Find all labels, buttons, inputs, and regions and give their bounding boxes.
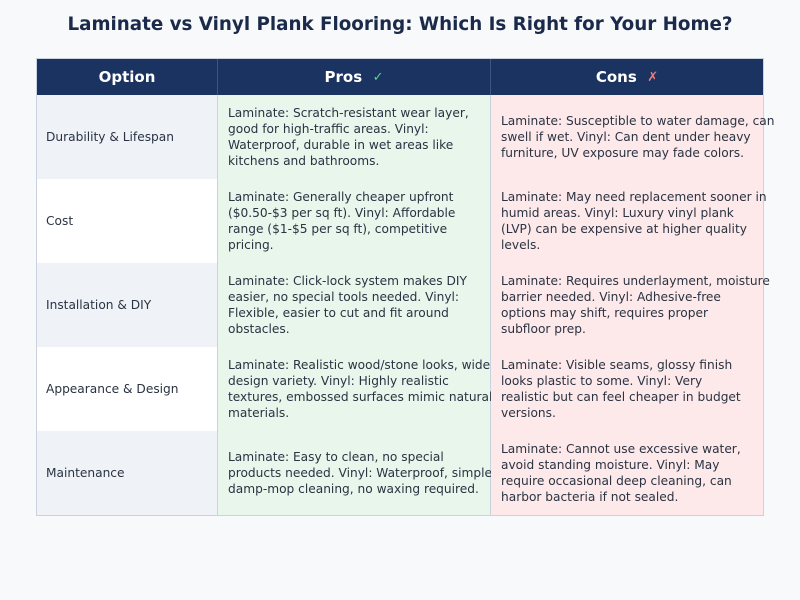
comparison table: (LVP) can be expensive at higher quality [501,222,747,236]
comparison table: damp-mop cleaning, no waxing required. [228,482,479,496]
comparison table: Laminate: Easy to clean, no special [228,450,444,464]
comparison table: products needed. Vinyl: Waterproof, simple [228,466,492,480]
row: appearance: Appearance & Design [46,382,179,396]
comparison table: Laminate: May need replacement sooner in [501,190,767,204]
comparison table: materials. [228,406,289,420]
header: option: Option [99,68,155,86]
comparison table: subfloor prep. [501,322,586,336]
comparison table: require occasional deep cleaning, can [501,474,732,488]
comparison table: pricing. [228,238,274,252]
header: pros [218,59,491,95]
row: cost: Cost [46,214,73,228]
row: appearance [37,347,218,431]
comparison table: kitchens and bathrooms. [228,154,379,168]
comparison table: looks plastic to some. Vinyl: Very [501,374,702,388]
comparison table: ($0.50-$3 per sq ft). Vinyl: Affordable [228,206,455,220]
header: cons: ✗ [647,70,658,84]
row: maintenance: Maintenance [46,466,124,480]
comparison table: obstacles. [228,322,290,336]
header: pros: ✓ [373,70,383,84]
row: installation: Installation & DIY [46,298,151,312]
row: cost [37,179,218,263]
header: cons [491,59,763,95]
comparison table: avoid standing moisture. Vinyl: May [501,458,719,472]
comparison table: humid areas. Vinyl: Luxury vinyl plank [501,206,734,220]
row: maintenance [37,431,218,515]
comparison table: options may shift, requires proper [501,306,708,320]
comparison table: Laminate: Realistic wood/stone looks, wide [228,358,490,372]
row: durability [37,95,218,179]
comparison table: Laminate: Susceptible to water damage, can [501,114,774,128]
comparison table: textures, embossed surfaces mimic natural [228,390,492,404]
comparison table: furniture, UV exposure may fade colors. [501,146,744,160]
comparison table: Laminate: Visible seams, glossy finish [501,358,732,372]
header: pros: Pros [324,68,362,86]
comparison table: Laminate: Click-lock system makes DIY [228,274,467,288]
row: installation [37,263,218,347]
comparison table: versions. [501,406,556,420]
comparison table [36,58,764,516]
comparison table: Laminate: Requires underlayment, moisture [501,274,770,288]
comparison table: Laminate: Cannot use excessive water, [501,442,741,456]
header: cons: Cons [596,68,637,86]
comparison table: Laminate: Generally cheaper upfront [228,190,453,204]
title: Laminate vs Vinyl Plank Flooring: Which Is Right for Your Home? [67,14,732,35]
comparison table: easier, no special tools needed. Vinyl: [228,290,459,304]
comparison table: levels. [501,238,540,252]
comparison table: Flexible, easier to cut and fit around [228,306,449,320]
comparison table: Laminate: Scratch-resistant wear layer, [228,106,469,120]
comparison table: harbor bacteria if not sealed. [501,490,678,504]
comparison table: barrier needed. Vinyl: Adhesive-free [501,290,721,304]
header: option [37,59,218,95]
comparison table: range ($1-$5 per sq ft), competitive [228,222,447,236]
comparison table: good for high-traffic areas. Vinyl: [228,122,429,136]
row: durability: Durability & Lifespan [46,130,174,144]
comparison table: design variety. Vinyl: Highly realistic [228,374,449,388]
comparison table: realistic but can feel cheaper in budget [501,390,741,404]
comparison table: swell if wet. Vinyl: Can dent under heavy [501,130,751,144]
comparison table: Waterproof, durable in wet areas like [228,138,453,152]
